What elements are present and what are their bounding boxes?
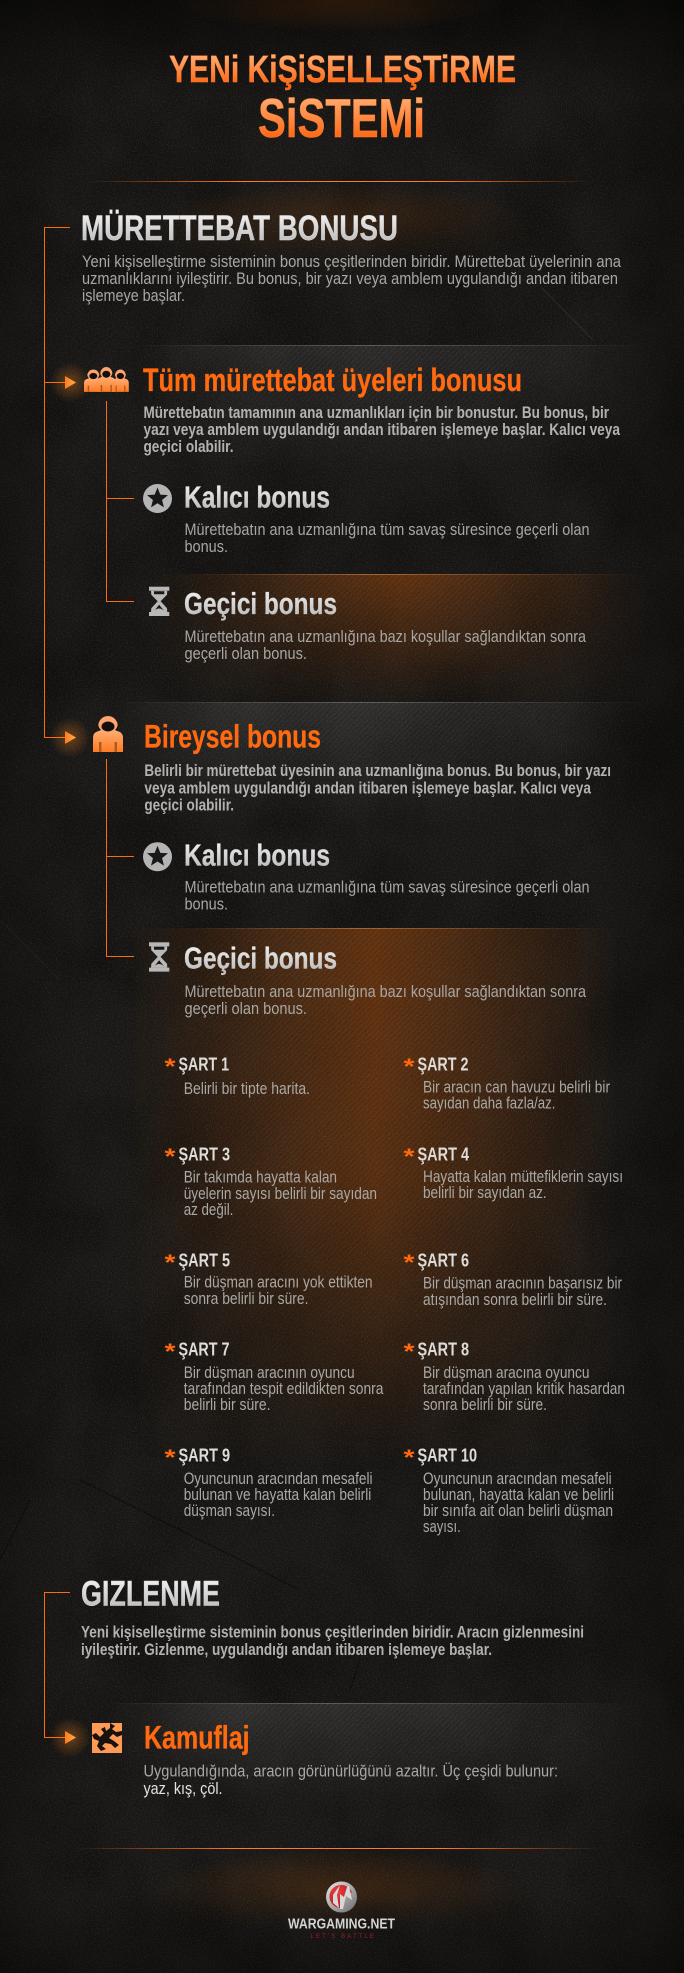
icon: individual crew member bbox=[93, 716, 123, 752]
condition 3: Bir takımda hayatta kalan bbox=[184, 1169, 337, 1187]
condition 10: bulunan, hayatta kalan ve belirli bbox=[423, 1486, 614, 1504]
condition 8 bbox=[404, 1339, 625, 1414]
connector: camouflage tree bbox=[44, 1592, 70, 1738]
text: concealment intro: Yeni kişiselleştirme sisteminin bonus çeşitlerinden biridir. Aracın gizlenmesini bbox=[81, 1624, 584, 1642]
heading: permanent bonus 2: Kalıcı bonus bbox=[184, 838, 330, 873]
condition 3: az değil. bbox=[184, 1201, 233, 1219]
logo: Wargaming.net: WARGAMING.NET bbox=[288, 1916, 395, 1933]
logo mark bbox=[326, 1882, 357, 1912]
icon: star permanent bbox=[143, 484, 172, 513]
heading: individual bonus: Bireysel bonus bbox=[144, 719, 321, 755]
panel: individual bonus backdrop bbox=[134, 702, 622, 792]
condition 8: Bir düşman aracına oyuncu bbox=[423, 1364, 590, 1382]
text: crew bonus intro bbox=[82, 252, 621, 305]
text: all crew description bbox=[144, 404, 621, 456]
text: individual description bbox=[144, 762, 611, 815]
condition 7: tarafından tespit edildikten sonra bbox=[184, 1380, 384, 1398]
text: individual description: veya amblem uygulandığı andan itibaren işlemeye başlar. Kalıcı veya bbox=[144, 779, 592, 797]
condition 7: belirli bir süre. bbox=[184, 1396, 270, 1414]
text: camouflage description: Uygulandığında, aracın görünürlüğünü azaltır. Üç çeşidi bulunur: bbox=[144, 1762, 558, 1781]
scratches bbox=[0, 287, 593, 1690]
condition 4: ŞART 4 bbox=[418, 1145, 469, 1165]
text: temporary bonus 2: geçerli olan bonus. bbox=[184, 999, 307, 1018]
condition 4: belirli bir sayıdan az. bbox=[423, 1184, 547, 1202]
condition 8: ŞART 8 bbox=[418, 1340, 469, 1360]
text: concealment intro bbox=[81, 1624, 584, 1659]
condition 1: * bbox=[164, 1054, 176, 1079]
condition 3 bbox=[164, 1144, 377, 1219]
panel: temporary bonus glow 2 with conditions bbox=[158, 928, 600, 1428]
condition 6: atışından sonra belirli bir süre. bbox=[423, 1291, 607, 1309]
logo: Wargaming.net: LET'S BATTLE bbox=[311, 1934, 374, 1940]
condition 10: sayısı. bbox=[423, 1518, 461, 1536]
condition 10: * bbox=[404, 1445, 415, 1470]
panel: camouflage backdrop bbox=[124, 1703, 590, 1779]
text: camouflage description bbox=[144, 1762, 558, 1798]
title bbox=[169, 49, 516, 149]
heading: temporary bonus: Geçici bonus bbox=[184, 586, 337, 621]
divider: top with glow bbox=[92, 181, 588, 246]
heading: all crew bonus: Tüm mürettebat üyeleri bonusu bbox=[143, 362, 522, 398]
condition 1: Belirli bir tipte harita. bbox=[184, 1080, 310, 1098]
condition 5 bbox=[164, 1250, 373, 1308]
arrow: to all crew bonus bbox=[50, 362, 90, 402]
condition 5: Bir düşman aracını yok ettikten bbox=[184, 1274, 373, 1292]
text: temporary bonus bbox=[184, 627, 586, 663]
condition 10: Oyuncunun aracından mesafeli bbox=[423, 1470, 612, 1488]
text: temporary bonus 2: Mürettebatın ana uzmanlığına bazı koşullar sağlandıktan sonra bbox=[184, 982, 586, 1001]
text: individual description: geçici olabilir. bbox=[144, 797, 234, 815]
icon: star permanent 2 bbox=[143, 842, 172, 871]
condition 9: düşman sayısı. bbox=[184, 1502, 275, 1520]
condition 6: ŞART 6 bbox=[418, 1251, 469, 1271]
condition 8: * bbox=[404, 1339, 415, 1364]
condition 2 bbox=[404, 1054, 610, 1113]
text: permanent bonus bbox=[184, 520, 590, 556]
condition 2: sayıdan daha fazla/az. bbox=[423, 1095, 555, 1113]
heading: crew bonus: MÜRETTEBAT BONUSU bbox=[81, 209, 398, 248]
logo: Wargaming.net bbox=[288, 1882, 395, 1940]
text: concealment intro: iyileştirir. Gizlenme, uygulandığı andan itibaren işlemeye başlar. bbox=[81, 1641, 492, 1659]
condition 6: Bir düşman aracının başarısız bir bbox=[423, 1275, 622, 1293]
heading: temporary bonus 2: Geçici bonus bbox=[184, 941, 337, 976]
arrow: to camouflage bbox=[50, 1718, 90, 1758]
condition 3: ŞART 3 bbox=[178, 1145, 230, 1165]
condition 4 bbox=[404, 1144, 623, 1202]
text: temporary bonus: Mürettebatın ana uzmanlığına bazı koşullar sağlandıktan sonra bbox=[184, 627, 586, 646]
divider: bottom with glow bbox=[80, 1848, 596, 1916]
text: crew bonus intro: işlemeye başlar. bbox=[82, 286, 185, 305]
condition 9: Oyuncunun aracından mesafeli bbox=[184, 1470, 373, 1488]
connector: main crew tree bbox=[44, 227, 70, 738]
icon: hourglass temporary bbox=[149, 587, 169, 616]
top glow bbox=[170, 0, 510, 32]
condition 10 bbox=[404, 1445, 614, 1536]
connector: individual tree bbox=[106, 759, 134, 957]
condition 6: * bbox=[404, 1250, 415, 1275]
condition 9: ŞART 9 bbox=[178, 1446, 230, 1466]
text: permanent bonus: Mürettebatın ana uzmanlığına tüm savaş süresince geçerli olan bbox=[184, 520, 590, 539]
condition 1 bbox=[164, 1054, 310, 1098]
condition 10: bir sınıfa ait olan belirli düşman bbox=[423, 1502, 613, 1520]
condition 7: * bbox=[164, 1339, 176, 1364]
heading: permanent bonus: Kalıcı bonus bbox=[184, 480, 330, 514]
condition 4: Hayatta kalan müttefiklerin sayısı bbox=[423, 1168, 623, 1186]
text: permanent bonus 2 bbox=[184, 877, 590, 913]
condition 7 bbox=[164, 1339, 384, 1414]
condition 2: ŞART 2 bbox=[418, 1055, 468, 1075]
condition 3: * bbox=[164, 1144, 176, 1169]
text: all crew description: geçici olabilir. bbox=[144, 438, 234, 456]
text: camouflage description: yaz, kış, çöl. bbox=[144, 1779, 222, 1798]
condition 9: * bbox=[164, 1445, 176, 1470]
condition 1: ŞART 1 bbox=[178, 1055, 229, 1075]
condition 2: Bir aracın can havuzu belirli bir bbox=[423, 1079, 610, 1097]
text: temporary bonus: geçerli olan bonus. bbox=[184, 644, 307, 663]
icon: crew group bbox=[84, 367, 129, 392]
condition 4: * bbox=[404, 1144, 415, 1169]
condition 10: ŞART 10 bbox=[418, 1446, 477, 1466]
icon: camouflage bbox=[92, 1723, 122, 1753]
heading: camouflage: Kamuflaj bbox=[144, 1719, 250, 1755]
condition 9: bulunan ve hayatta kalan belirli bbox=[184, 1486, 371, 1504]
icon: hourglass temporary 2 bbox=[149, 942, 169, 972]
text: permanent bonus 2: bonus. bbox=[184, 894, 228, 913]
text: permanent bonus 2: Mürettebatın ana uzmanlığına tüm savaş süresince geçerli olan bbox=[184, 877, 590, 896]
condition 5: sonra belirli bir süre. bbox=[184, 1290, 308, 1308]
condition 8: sonra belirli bir süre. bbox=[423, 1396, 547, 1414]
condition 3: üyelerin sayısı belirli bir sayıdan bbox=[184, 1185, 377, 1203]
title: YENi KiŞiSELLEŞTiRME bbox=[169, 49, 516, 91]
condition 2: * bbox=[404, 1054, 415, 1079]
panel: temporary bonus glow 1 bbox=[178, 574, 624, 688]
text: permanent bonus: bonus. bbox=[184, 537, 228, 556]
condition 7: ŞART 7 bbox=[178, 1340, 230, 1360]
condition 6 bbox=[404, 1250, 622, 1309]
text: temporary bonus 2 bbox=[184, 982, 586, 1018]
condition 5: ŞART 5 bbox=[178, 1251, 230, 1271]
arrow: to individual bonus bbox=[50, 718, 90, 758]
condition 7: Bir düşman aracının oyuncu bbox=[184, 1364, 355, 1382]
panel: crew bonus backdrop bbox=[156, 345, 624, 431]
condition 9 bbox=[164, 1445, 373, 1520]
condition 8: tarafından yapılan kritik hasardan bbox=[423, 1380, 625, 1398]
title: SiSTEMi bbox=[258, 87, 425, 149]
heading: concealment: GIZLENME bbox=[81, 1575, 220, 1614]
condition 5: * bbox=[164, 1250, 176, 1275]
connector: all crew tree bbox=[106, 401, 134, 602]
